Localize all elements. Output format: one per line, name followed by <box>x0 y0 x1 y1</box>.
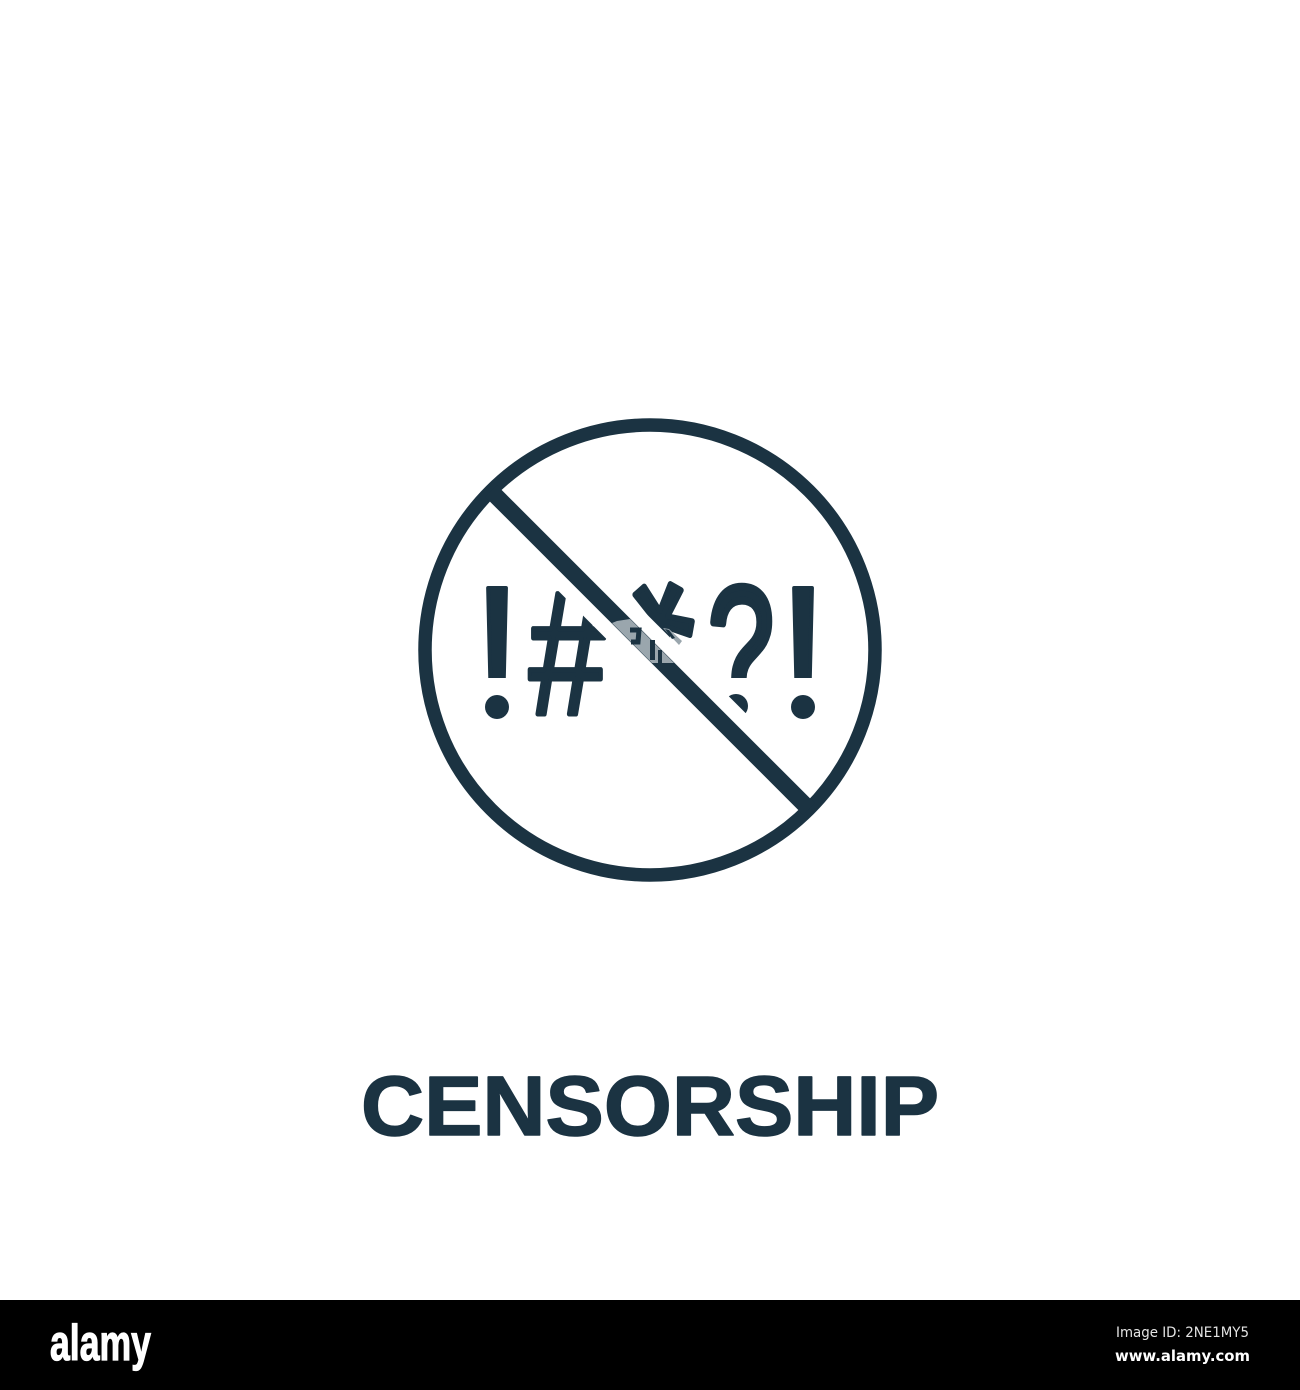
prohibition ring <box>425 425 875 875</box>
infographic canvas <box>0 418 1300 1390</box>
watermark fragment on slash <box>612 619 682 663</box>
website: www.alamy.com <box>1115 1347 1250 1365</box>
censored symbols <box>485 581 815 719</box>
white band around slash <box>480 480 820 820</box>
image id: Image ID: 2NE1MY5 <box>1116 1325 1249 1341</box>
footer logo: alamy <box>50 1315 151 1371</box>
icon: censorship prohibition sign <box>425 425 875 875</box>
censored symbols: # <box>529 556 605 752</box>
censored symbols: ! <box>777 549 829 756</box>
censored symbols: ? <box>708 550 774 749</box>
censored symbols: * <box>611 469 703 704</box>
footer bar <box>0 1300 1300 1390</box>
prohibition slash <box>491 491 809 809</box>
title: CENSORSHIP <box>361 1059 939 1153</box>
censored symbols: ! <box>471 549 523 756</box>
